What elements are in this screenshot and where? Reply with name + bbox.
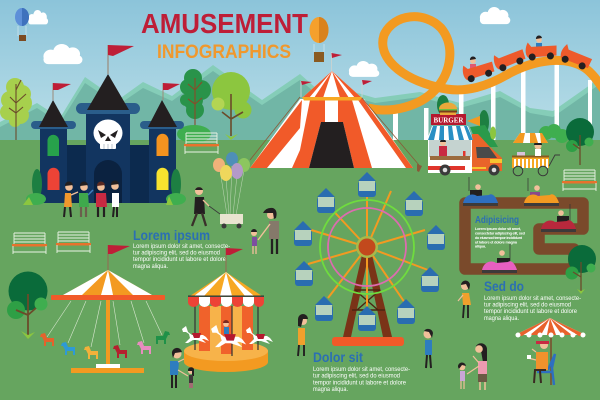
panel text: adipisicing: consectetur adipiscing elit, sed [475,232,526,236]
sky background [0,0,600,142]
ferris wheel [294,172,445,346]
panel text: adipisicing: Adipisicing [475,215,519,226]
tree: round lime [212,72,252,140]
bench right [562,170,597,191]
man and child [251,208,279,254]
title: AMUSEMENT [141,8,308,39]
burger sign text: BURGER [434,116,464,124]
icon: blue hot air balloon [15,8,29,41]
bumper cars [463,177,576,273]
tree: lower left [7,272,48,339]
woman by ferris wheel [298,314,308,356]
woman and girl [458,343,487,390]
balloon seller [192,152,250,228]
bench behind castle [184,133,219,154]
man in blue [424,329,433,368]
panel text: lorem ipsum: tur adipiscing elit, sed do eiusmod [133,250,220,256]
tree: dark green [177,69,211,143]
tent [250,52,422,172]
panel text: adipisicing: do eiusmod tempor incididunt [475,236,523,240]
panel text: dolor sit: Lorem ipsum dolor sit amet, consecte- [313,367,410,373]
panel text: sed do: Sed do [484,279,524,294]
panel text: lorem ipsum: Lorem ipsum [133,228,210,243]
panel text: dolor sit: magna aliqua. [313,387,348,393]
mountains [0,65,600,142]
panel text: sed do: tempor incididunt ut labore et dolore [484,309,578,315]
panel text: lorem ipsum: Lorem ipsum dolor sit amet, consecte- [133,244,230,250]
panel text: sed do [484,279,581,322]
merry-go-round [182,248,273,372]
panel text: sed do: magna aliqua. [484,316,519,322]
subtitle: INFOGRAPHICS [157,41,291,63]
tree bushes behind truck [437,95,569,147]
gondolas [294,172,445,331]
panel text: dolor sit: tempor incididunt ut labore et dolore [313,380,407,386]
panel text: sed do: Lorem ipsum dolor sit amet, consecte- [484,296,581,302]
castle [31,45,184,203]
panel text: dolor sit [313,350,410,393]
swing horses [40,331,170,359]
food cart [512,133,560,176]
benches lower left [12,232,91,254]
clouds [28,7,510,77]
panel text: adipisicing: aliqua. [475,244,486,248]
panel text: adipisicing: ut labore et dolore magna [475,240,518,244]
people group at castle [64,180,119,217]
ground [0,140,600,400]
burger truck [427,103,502,176]
icon: burger [439,103,457,115]
seated man under umbrella [515,318,586,385]
panel text: lorem ipsum: tempor incididunt ut labore et dolore [133,257,227,263]
panel text: adipisicing [475,215,526,248]
coaster cars [462,35,593,83]
panel text: lorem ipsum [133,228,230,270]
bushes by castle [23,169,186,205]
roller coaster track [368,17,600,110]
tree: upper right [566,118,594,165]
panel text: sed do: tur adipiscing elit, sed do eiusmod [484,302,571,308]
panel text: lorem ipsum: magna aliqua. [133,264,168,270]
man in orange [458,280,471,318]
tree: right of track [566,245,596,294]
wheel spokes [308,191,428,310]
panel text: dolor sit: tur adipiscing elit, sed do eiusmod [313,374,400,380]
icon: megaphone [467,116,480,126]
coaster support pillars [393,64,592,140]
man and girl at carousel [170,348,194,388]
swing carousel [40,245,170,373]
tree: yellow-green left [0,78,32,140]
wheel tower [332,255,404,346]
icon: orange hot air balloon [310,17,328,62]
panel text: adipisicing: Lorem ipsum dolor sit amet, [475,227,521,231]
icon: skull [94,120,122,149]
bumper car track [465,203,583,269]
panel text: dolor sit: Dolor sit [313,350,363,365]
